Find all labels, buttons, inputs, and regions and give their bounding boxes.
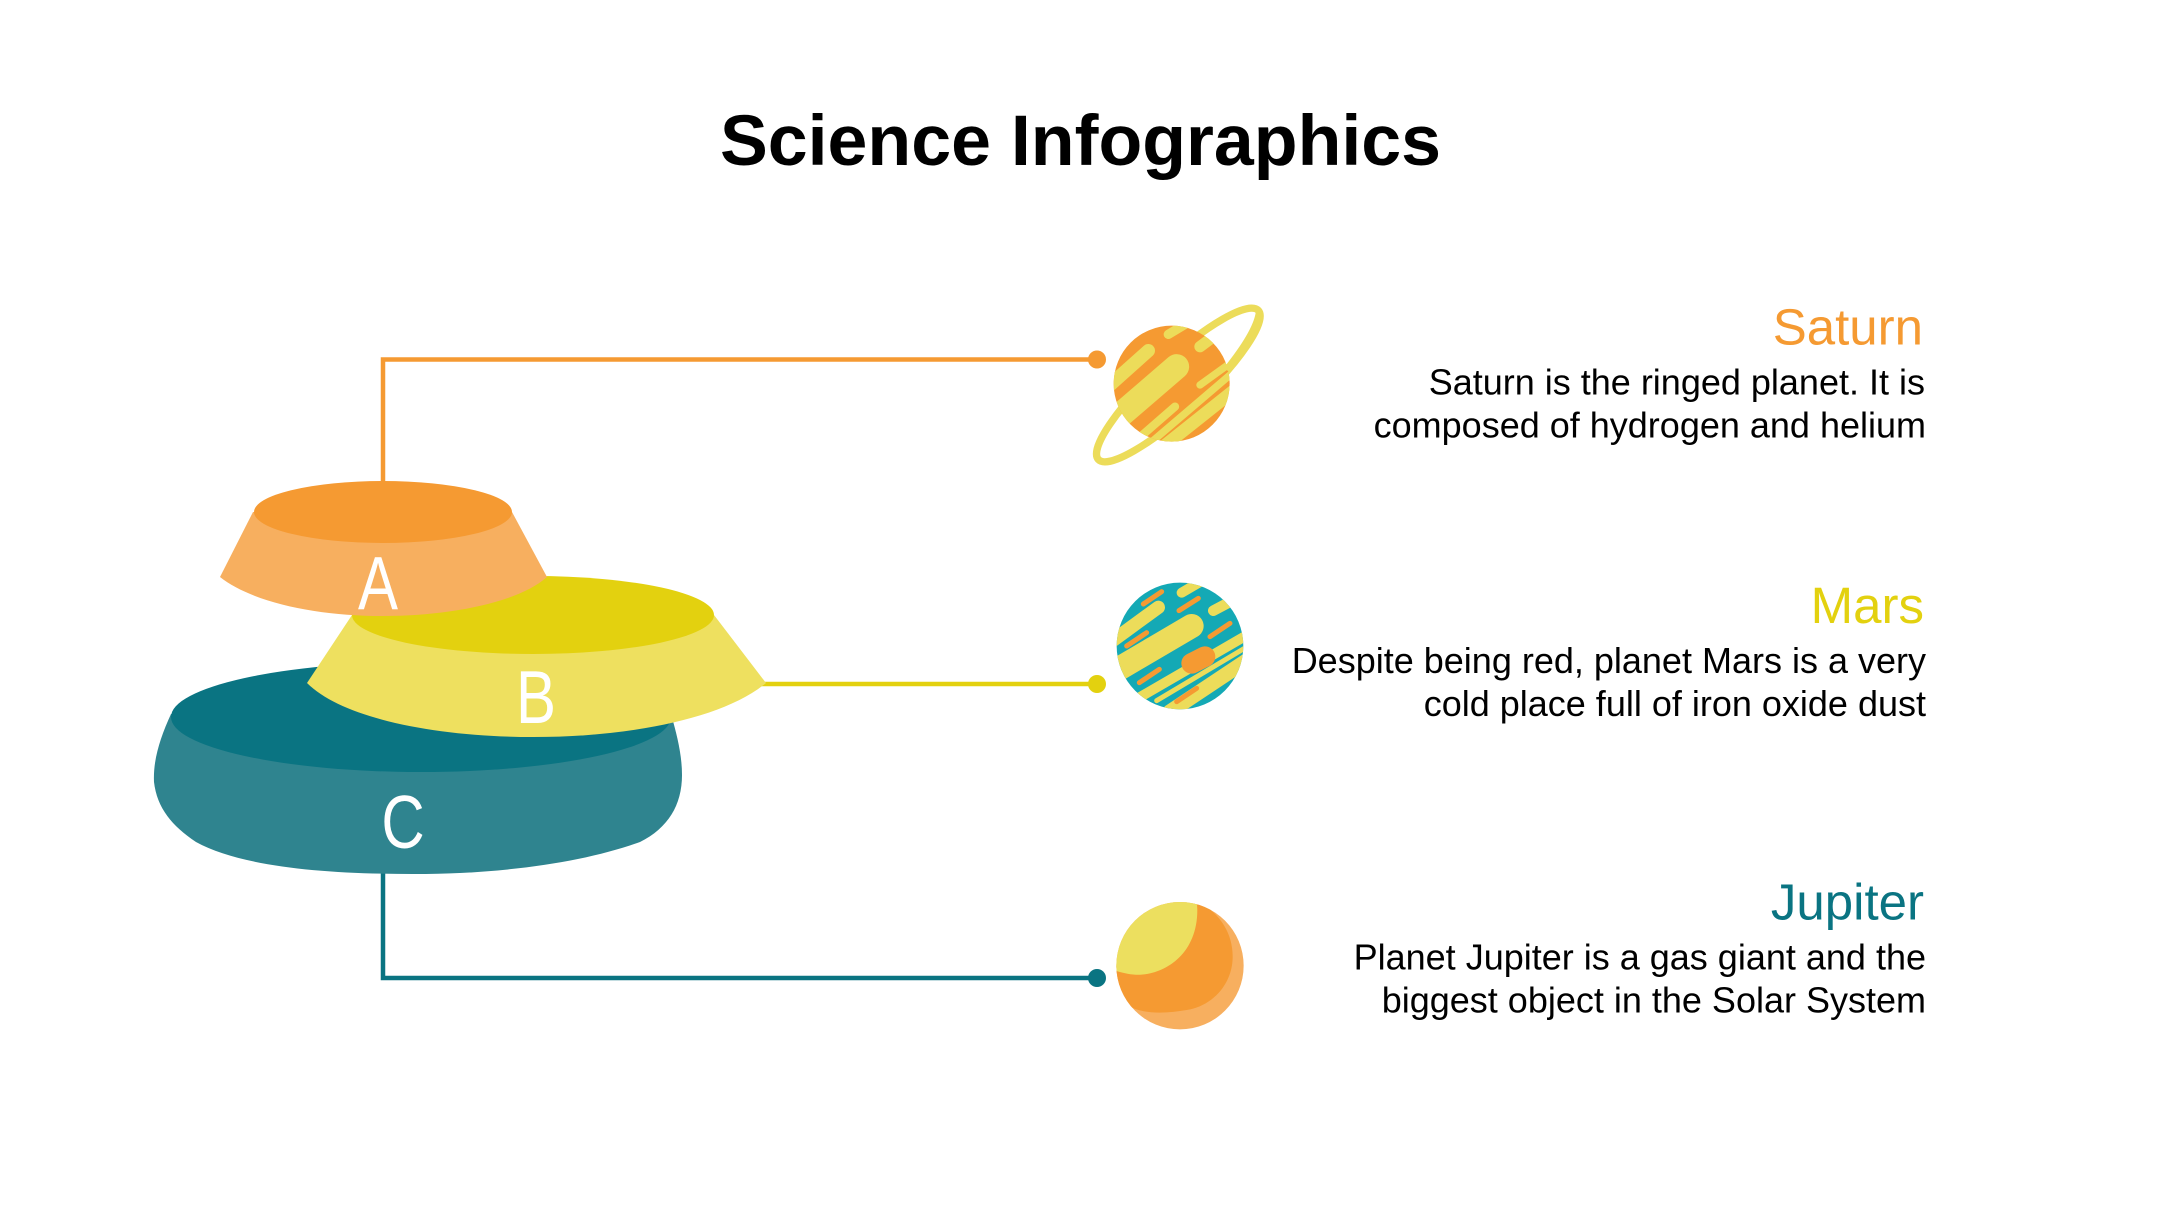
disc B: B [516, 657, 556, 740]
text block: Jupiter: biggest object in the Solar System [1382, 980, 1926, 1020]
disc B [307, 576, 766, 740]
connector: Saturn line [383, 350, 1106, 490]
connector: Jupiter line [383, 866, 1106, 987]
disc C [154, 662, 682, 874]
disc A [220, 481, 547, 626]
text block: Saturn: Saturn [1773, 298, 1923, 356]
text block: Saturn: composed of hydrogen and helium [1374, 404, 1926, 446]
text block: Jupiter: Jupiter [1771, 874, 1924, 930]
text block: Mars [1292, 577, 1926, 724]
text block: Jupiter [1354, 874, 1926, 1020]
connector: Mars line [758, 675, 1106, 693]
text block: Jupiter: Planet Jupiter is a gas giant and the [1354, 936, 1926, 978]
text block: Saturn: Saturn is the ringed planet. It is [1429, 362, 1925, 402]
icon: Mars [1116, 582, 1244, 710]
text block: Mars: Despite being red, planet Mars is a very [1292, 640, 1926, 681]
disc A: A [358, 543, 399, 626]
icon: Saturn [1092, 304, 1264, 466]
title: Science Infographics [720, 101, 1441, 181]
icon: Jupiter [1112, 897, 1244, 1029]
disc C: C [381, 782, 425, 865]
text block: Mars: Mars [1811, 577, 1924, 634]
text block: Saturn [1374, 298, 1926, 446]
layered disc diagram [154, 481, 766, 874]
text block: Mars: cold place full of iron oxide dust [1424, 683, 1926, 724]
